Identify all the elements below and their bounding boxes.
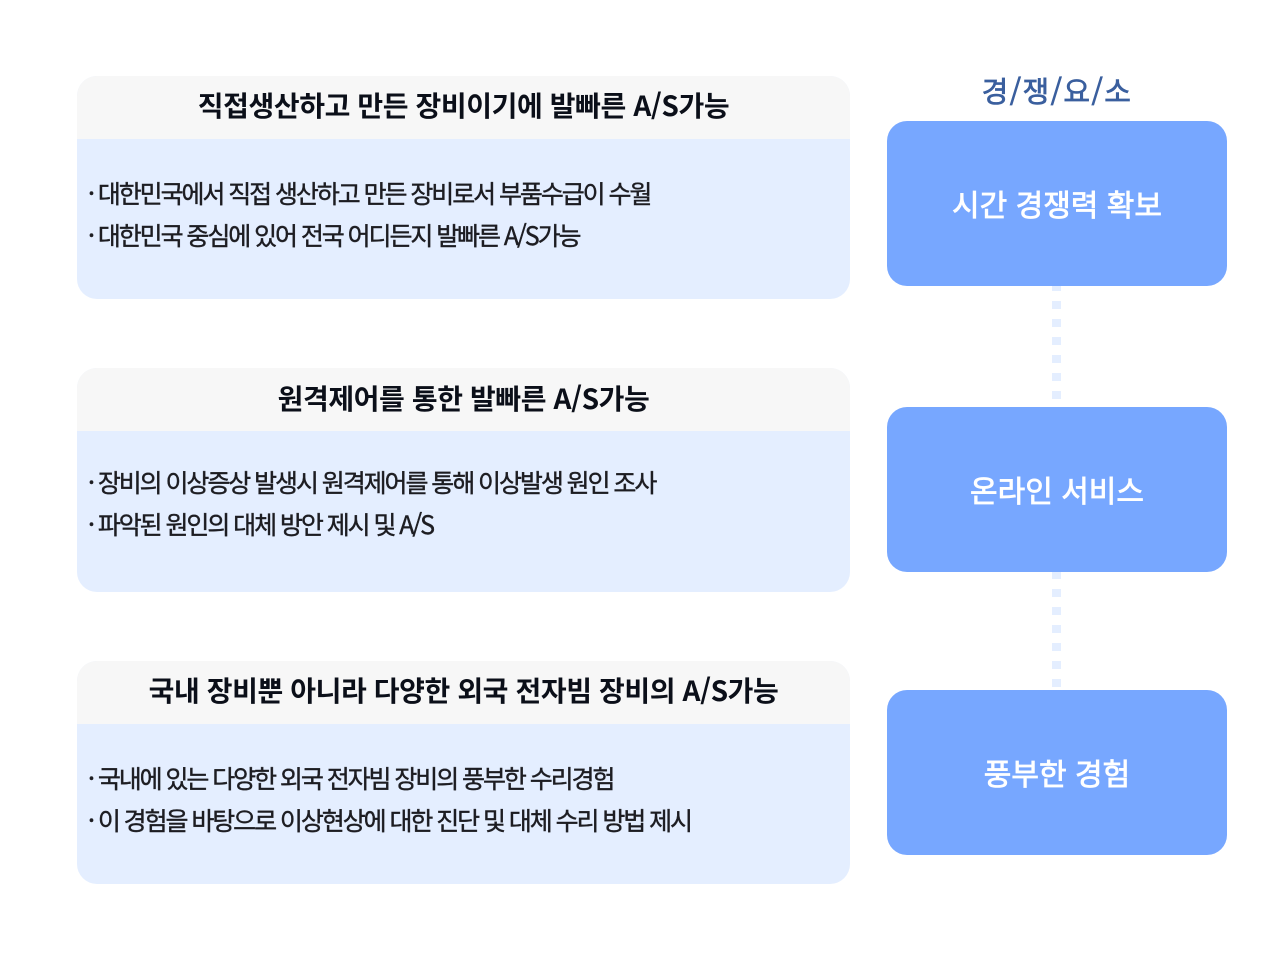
box: rich experience: 풍부한 경험 [984, 750, 1130, 794]
heading: remote control: 원격제어를 통한 발빠른 A/S가능 [278, 378, 649, 418]
box: rich experience [887, 690, 1227, 855]
heading: competitive factors: 경/쟁/요/소 [982, 69, 1132, 111]
heading: foreign equipment [77, 661, 850, 724]
text: remote control line 2: · 파악된 원인의 대체 방안 제시 및 A/S [88, 506, 433, 542]
panel: remote control [77, 368, 850, 592]
box: time competitiveness: 시간 경쟁력 확보 [952, 181, 1162, 225]
heading: remote control [77, 368, 850, 431]
panel: direct production [77, 76, 850, 299]
text: foreign equipment line 1: · 국내에 있는 다양한 외국 전자빔 장비의 풍부한 수리경험 [88, 760, 613, 796]
heading: direct production: 직접생산하고 만든 장비이기에 발빠른 A/S가능 [198, 85, 729, 125]
text: remote control line 1: · 장비의 이상증상 발생시 원격제어를 통해 이상발생 원인 조사 [88, 464, 655, 500]
box: online service [887, 407, 1227, 572]
heading: direct production [77, 76, 850, 139]
heading: foreign equipment: 국내 장비뿐 아니라 다양한 외국 전자빔 장비의 A/S가능 [149, 670, 778, 710]
text: foreign equipment line 2: · 이 경험을 바탕으로 이상현상에 대한 진단 및 대체 수리 방법 제시 [88, 802, 691, 838]
box: time competitiveness [887, 121, 1227, 286]
box: online service: 온라인 서비스 [970, 467, 1144, 511]
text: direct production line 1: · 대한민국에서 직접 생산하고 만든 장비로서 부품수급이 수월 [88, 175, 650, 211]
text: direct production line 2: · 대한민국 중심에 있어 전국 어디든지 발빠른 A/S가능 [88, 217, 579, 253]
panel: foreign equipment [77, 661, 850, 884]
